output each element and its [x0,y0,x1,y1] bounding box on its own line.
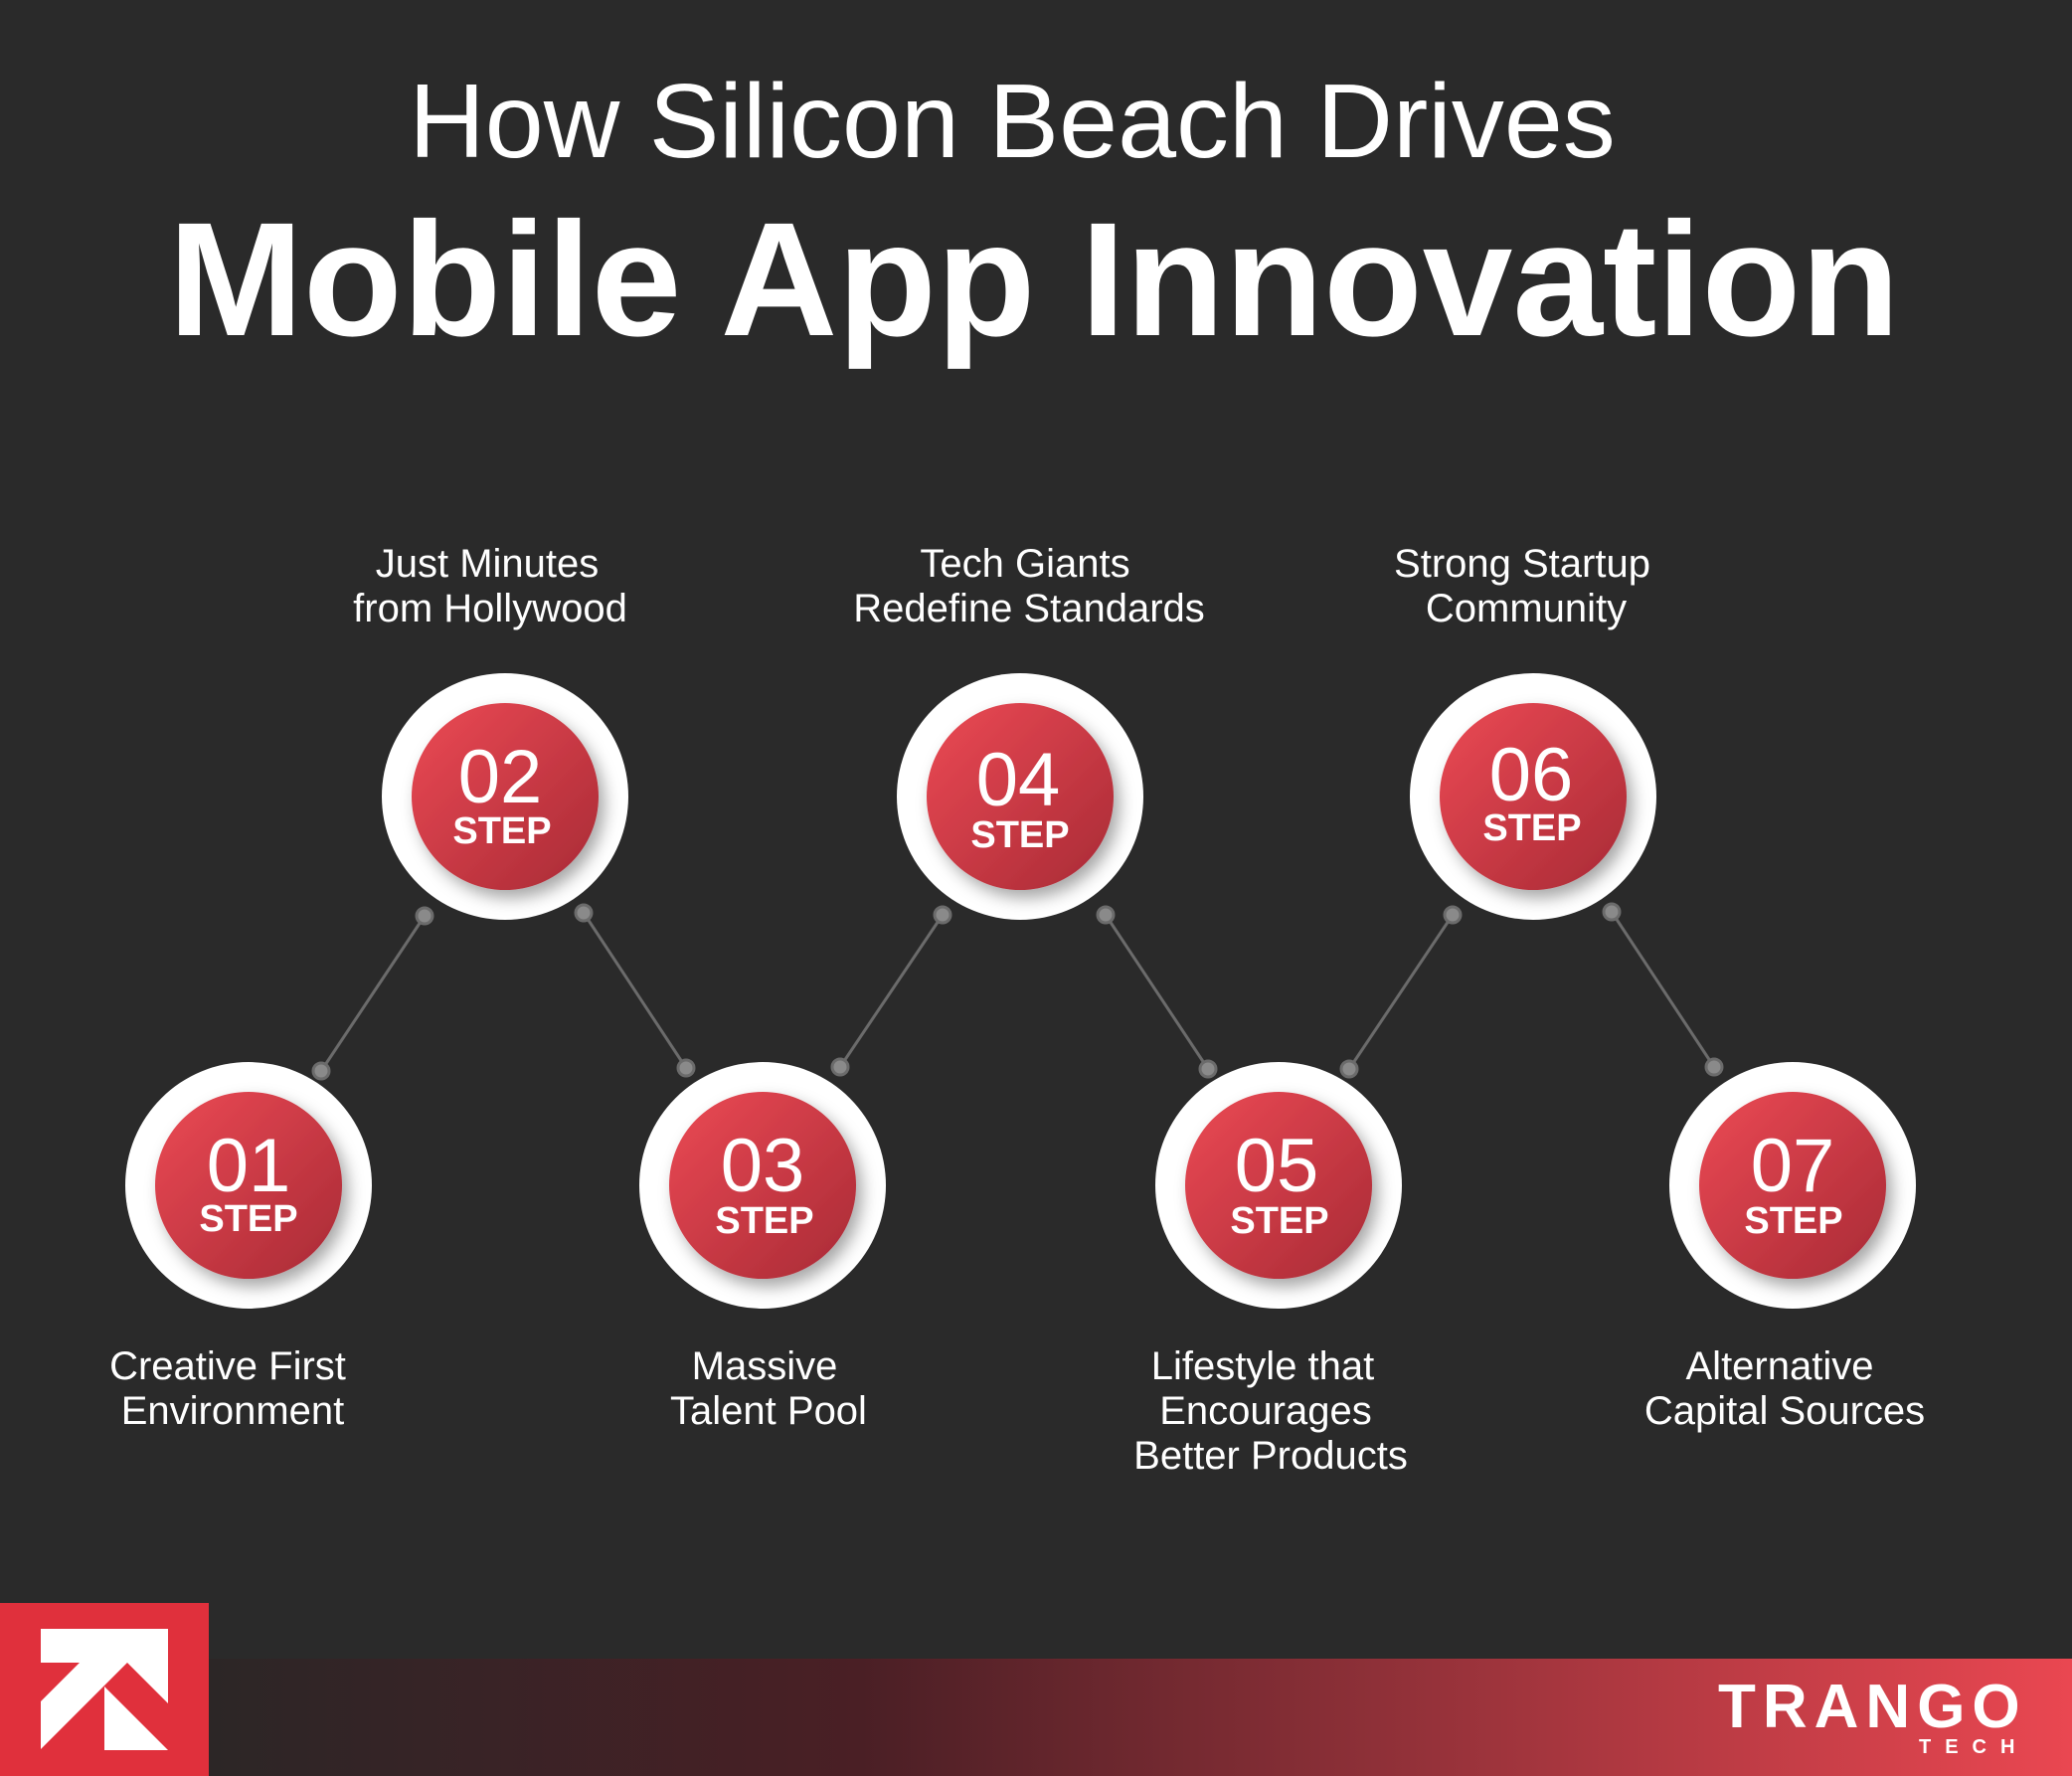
labels: Encourages [1159,1389,1372,1433]
brand text: TRANGO [1718,1673,2027,1741]
step 03: STEP [715,1200,814,1242]
step 04: 04 [976,738,1060,822]
labels: Talent Pool [670,1389,867,1433]
step 05: 05 [1235,1124,1318,1208]
step 03 [639,1062,886,1309]
step 02: STEP [452,810,552,852]
step 01: 01 [207,1124,290,1208]
connectors [313,904,1722,1079]
title: Mobile App Innovation [168,188,1900,370]
step 04: STEP [970,814,1070,856]
labels: Just Minutes [376,542,599,586]
title: How Silicon Beach Drives [409,63,1616,180]
labels: Alternative [1686,1344,1873,1388]
labels: Creative First [109,1344,346,1388]
step 06: 06 [1489,733,1573,817]
labels: Strong Startup [1394,542,1650,586]
step 02: 02 [458,735,542,819]
labels: Redefine Standards [853,587,1205,630]
labels: Tech Giants [920,542,1130,586]
labels: Capital Sources [1644,1389,1925,1433]
step 05 [1155,1062,1402,1309]
step 01: STEP [199,1198,298,1240]
logo icon [0,1603,209,1776]
step 05: STEP [1230,1200,1329,1242]
step 07: STEP [1744,1200,1843,1242]
brand text: TECH [1919,1736,2028,1758]
footer bar [209,1659,2072,1776]
step 06: STEP [1482,807,1582,849]
step 01 [125,1062,372,1309]
labels: Lifestyle that [1151,1344,1374,1388]
labels: Environment [121,1389,344,1433]
step 04 [897,673,1143,920]
step 07 [1669,1062,1916,1309]
step 06 [1410,673,1656,920]
labels [109,542,1925,1478]
step 02 [382,673,628,920]
labels: Community [1426,587,1627,630]
step 07: 07 [1751,1124,1834,1208]
step 03: 03 [721,1124,804,1208]
labels: Better Products [1133,1434,1408,1478]
labels: from Hollywood [353,587,627,630]
labels: Massive [692,1344,837,1388]
title [168,63,1900,370]
